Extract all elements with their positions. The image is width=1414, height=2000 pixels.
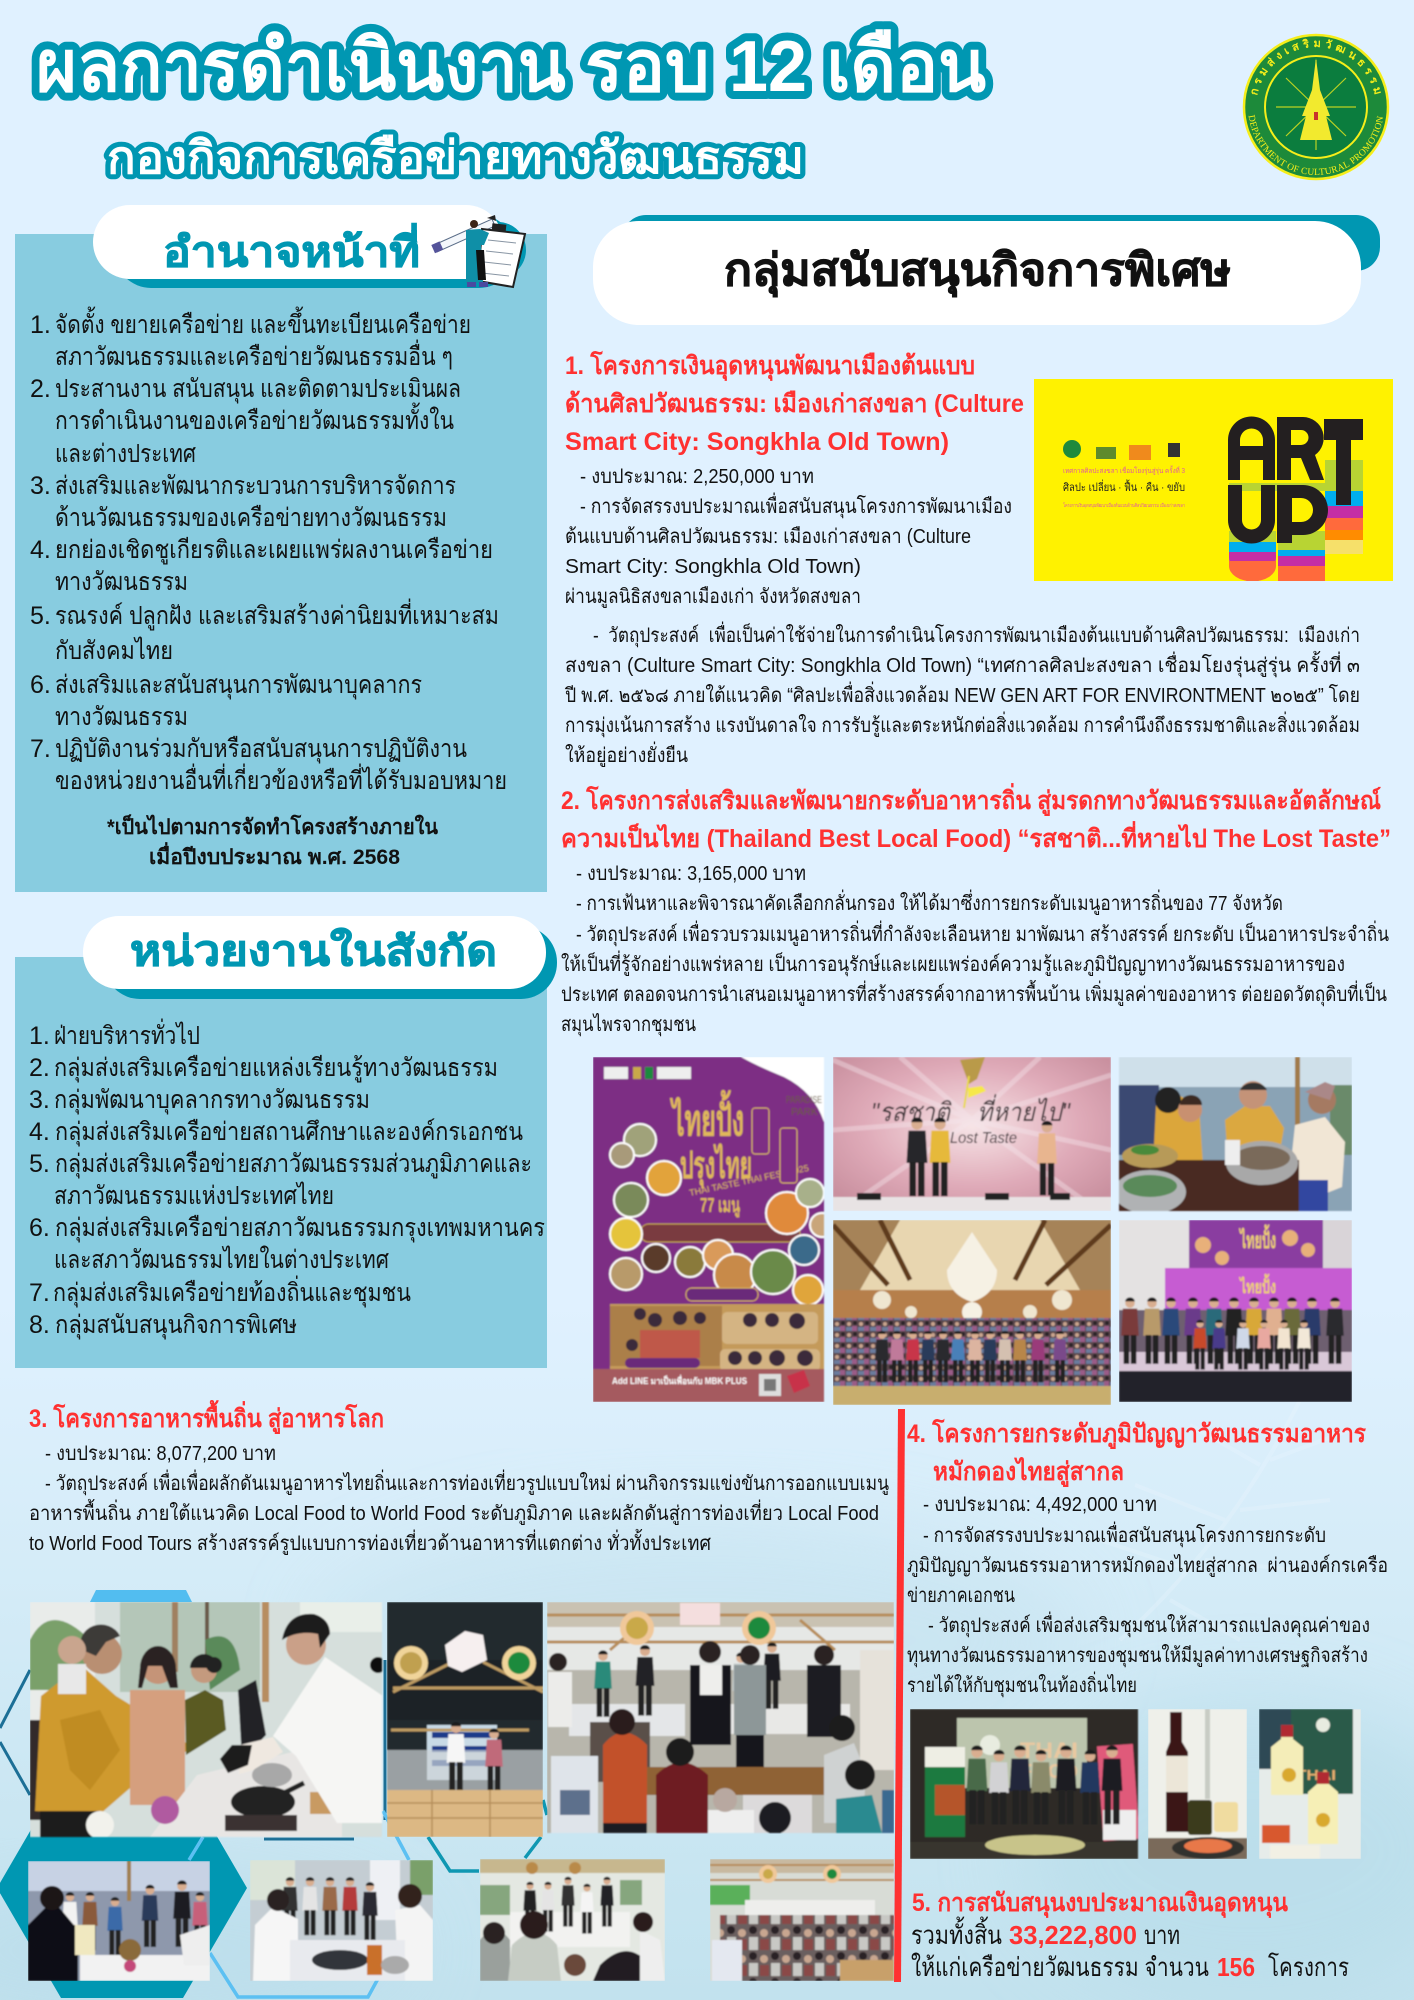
text block 3: อาหารพื้นถิ่น ภายใต้แนวคิด Local Food to World Food ระดับภูมิภาค และผลักดันสู่การท่องเที่ยว Local Food [29, 1499, 879, 1526]
section 5: total support budget: 33,222,800 [1009, 1920, 1137, 1950]
text block 1: Smart City: Songkhla Old Town) [565, 556, 861, 578]
heading 2: ความเป็นไทย (Thailand Best Local Food) “รสชาติ...ที่หายไป The Lost Taste” [561, 821, 1391, 853]
list: duties: 3. [30, 472, 51, 500]
note: *เป็นไปตามการจัดทำโครงสร้างภายใน [107, 813, 439, 839]
photo: press conference group: ไทยปั้ง [1239, 1273, 1276, 1297]
text block 1: ต้นแบบด้านศิลปวัฒนธรรม: เมืองเก่าสงขลา (Culture [565, 526, 971, 548]
heading: powers and duties: อำนาจหน้าที่ [163, 223, 420, 275]
text block 2: สมุนไพรจากชุมชน [561, 1013, 696, 1037]
text block 4: - งบประมาณ: 4,492,000 บาท [923, 1494, 1157, 1516]
section 2: Thailand best local food [561, 783, 1391, 1405]
list: duties: 7. [30, 735, 51, 763]
text block 3: - งบประมาณ: 8,077,200 บาท [45, 1443, 276, 1465]
text block 2: - การเฟ้นหาและพิจารณาคัดเลือกกลั่นกรอง ให้ได้มาซึ่งการยกระดับเมนูอาหารถิ่นของ 77 จังหวัด [576, 889, 1283, 916]
text block 1: ให้อยู่อย่างยั่งยืน [565, 741, 688, 768]
list: units: 8. [29, 1311, 50, 1339]
list: units: 3. [29, 1086, 50, 1114]
logo: department of cultural promotion: กรมส่งเสริมวัฒนธรรม [1252, 38, 1381, 95]
text block 2 [561, 863, 1389, 1037]
list: duties: ปฏิบัติงานร่วมกับหรือสนับสนุนการปฏิบัติงาน [55, 735, 467, 764]
poster: art up: ศิลปะ เปลี่ยน · ฟื้น · คืน · ขยับ [1063, 479, 1185, 494]
heading: subordinate units [83, 916, 557, 999]
photo: workshop cooking [250, 1860, 433, 1981]
photo: ballroom group [833, 1220, 1111, 1405]
poster: art up [1034, 379, 1393, 581]
title: ผลการดำเนินงาน รอบ 12 เดือน [36, 27, 986, 107]
poster: thai taste thai fest: ปรุงไทย [680, 1143, 752, 1189]
heading 4: 4. โครงการยกระดับภูมิปัญญาวัฒนธรรมอาหาร [907, 1418, 1367, 1450]
photo: cooking stage [387, 1602, 543, 1837]
photo: workshop children [28, 1861, 210, 1981]
photo: thai food launch: FOOD [1020, 1761, 1078, 1783]
list: duties: 4. [30, 536, 51, 564]
heading: subordinate units: หน่วยงานในสังกัด [130, 927, 497, 974]
text block 1: ผ่านมูลนิธิสงขลาเมืองเก่า จังหวัดสงขลา [565, 586, 861, 609]
list: units: และสภาวัฒนธรรมไทยในต่างประเทศ [54, 1245, 389, 1274]
text block 1 [565, 466, 1360, 768]
list: duties: ทางวัฒนธรรม [55, 568, 188, 596]
poster: thai taste thai fest [593, 1057, 834, 1402]
list: units: 1. [29, 1022, 50, 1050]
text block 4: ข่ายภาคเอกชน [907, 1585, 1015, 1607]
decorative hexagons [0, 1590, 547, 1998]
list: units: กลุ่มส่งเสริมเครือข่ายสภาวัฒนธรรมกรุงเทพมหานคร [55, 1214, 545, 1243]
photo: food tasting [1114, 1057, 1352, 1214]
heading 3: 3. โครงการอาหารพื้นถิ่น สู่อาหารโลก [29, 1399, 384, 1435]
photo: chef and official [30, 1602, 386, 1839]
list: duties: 6. [30, 671, 51, 699]
list: units: 4. [29, 1118, 50, 1146]
text block 4: รายได้ให้กับชุมชนในท้องถิ่นไทย [907, 1671, 1137, 1698]
list: units: 2. [29, 1054, 50, 1082]
photo: sauces and jars [1148, 1709, 1247, 1859]
list: duties: 2. [30, 375, 51, 403]
text block 4: - การจัดสรรงบประมาณเพื่อสนับสนุนโครงการยกระดับ [923, 1521, 1326, 1548]
text block 2: - งบประมาณ: 3,165,000 บาท [576, 863, 806, 885]
poster: thai taste thai fest: ไทยปั้ง [670, 1089, 744, 1144]
list: units: 6. [29, 1214, 50, 1242]
section 3: local food to world food [28, 1399, 894, 1981]
section 5: total support budget: โครงการ [1268, 1952, 1349, 1982]
section 5: total support budget: 5. การสนับสนุนงบประมาณเงินอุดหนุน [912, 1889, 1288, 1919]
text block 4 [907, 1494, 1388, 1698]
section 5: total support budget: รวมทั้งสิ้น [911, 1916, 1002, 1950]
red divider bar [894, 1409, 905, 1982]
photo: lost taste stage [833, 1057, 1111, 1211]
list: duties: รณรงค์ ปลูกฝัง และเสริมสร้างค่านิยมที่เหมาะสม [55, 598, 499, 631]
photo: workshop crowd [480, 1859, 665, 1981]
panel: subordinate units [15, 916, 557, 1368]
section 5: total support budget [911, 1889, 1349, 1982]
list: duties: ประสานงาน สนับสนุน และติดตามประเมินผล [55, 375, 461, 404]
photo: booth crowd [710, 1859, 894, 1981]
photo: pineapple bottles: THAI [1296, 1767, 1336, 1784]
list: units: กลุ่มส่งเสริมเครือข่ายสภาวัฒนธรรมส่วนภูมิภาคและ [55, 1150, 532, 1179]
photo: lost taste stage: "รสชาติ [871, 1097, 952, 1127]
list: units: กลุ่มพัฒนาบุคลากรทางวัฒนธรรม [54, 1086, 370, 1115]
list: duties: ส่งเสริมและพัฒนากระบวนการบริหารจัดการ [55, 472, 456, 500]
section 5: total support budget: ให้แก่เครือข่ายวัฒนธรรม จำนวน [911, 1952, 1209, 1982]
list: units: กลุ่มส่งเสริมเครือข่ายสถานศึกษาและองค์กรเอกชน [55, 1118, 523, 1147]
poster: thai taste thai fest: 77 เมนู [700, 1195, 740, 1219]
poster: art up: เทศกาลศิลปะสงขลา เชื่อมโยงรุ่นสู่รุ่น ครั้งที่ 3 [1063, 464, 1185, 475]
note: เมื่อปีงบประมาณ พ.ศ. 2568 [149, 841, 400, 869]
photo: thai food launch [910, 1709, 1139, 1859]
heading 1: ด้านศิลปวัฒนธรรม: เมืองเก่าสงขลา (Culture [565, 390, 1024, 418]
text block 1: - งบประมาณ: 2,250,000 บาท [580, 466, 814, 488]
text block 3 [29, 1443, 889, 1556]
heading 1: Smart City: Songkhla Old Town) [565, 428, 949, 456]
list: duties: จัดตั้ง ขยายเครือข่าย และขึ้นทะเบียนเครือข่าย [55, 306, 471, 339]
poster: thai taste thai fest: THAI TASTE THAI FEST 2025 [688, 1163, 810, 1198]
list: duties: ส่งเสริมและสนับสนุนการพัฒนาบุคลากร [55, 671, 422, 700]
text block 1: สงขลา (Culture Smart City: Songkhla Old Town) “เทศกาลศิลปะสงขลา เชื่อมโยงรุ่นสู่รุ่น ครั้งที่ ๓ [565, 651, 1360, 678]
logo: department of cultural promotion [1242, 34, 1390, 180]
heading 4: หมักดองไทยสู่สากล [933, 1456, 1124, 1488]
heading 4 [907, 1418, 1367, 1488]
section 1: culture fund Songkhla [565, 350, 1393, 768]
list: duties: 1. [30, 311, 51, 339]
photo: booth audience [547, 1602, 894, 1834]
list: units: สภาวัฒนธรรมแห่งประเทศไทย [54, 1181, 334, 1210]
list: duties [30, 306, 507, 795]
note [107, 813, 439, 869]
photo: lost taste stage: Lost Taste [950, 1130, 1017, 1147]
list: duties: ทางวัฒนธรรม [55, 703, 188, 731]
heading 1: 1. โครงการเงินอุดหนุนพัฒนาเมืองต้นแบบ [565, 350, 975, 382]
list: duties: สภาวัฒนธรรมและเครือข่ายวัฒนธรรมอื่น ๆ [55, 339, 453, 371]
logo: department of cultural promotion: DEPARTMENT OF CULTURAL PROMOTION [1248, 114, 1384, 175]
panel: powers and duties [15, 205, 547, 892]
list: duties: การดำเนินงานของเครือข่ายวัฒนธรรมทั้งใน [55, 402, 454, 435]
list: units: ฝ่ายบริหารทั่วไป [54, 1018, 200, 1050]
poster: art up: โครงการเงินอุดหนุนพัฒนาเมืองต้นแบบด้านศิลปวัฒนธรรม เมืองเก่าสงขลา [1063, 502, 1185, 509]
photo: thai food launch: THAI [1020, 1738, 1078, 1763]
heading: powers and duties [93, 205, 526, 288]
list: duties: ของหน่วยงานอื่นที่เกี่ยวข้องหรือที่ได้รับมอบหมาย [55, 763, 507, 795]
section 5: total support budget: 156 [1217, 1952, 1255, 1982]
poster: thai taste thai fest: Add LINE มาเป็นเพื่อนกับ MBK PLUS [612, 1374, 747, 1386]
list: units: กลุ่มสนับสนุนกิจการพิเศษ [55, 1311, 297, 1340]
photo: lost taste stage: ที่หายไป" [977, 1094, 1072, 1127]
heading 2 [561, 783, 1391, 853]
section 4: fermented food wisdom [907, 1418, 1388, 1859]
photo: press conference group: ไทยปั้ง [1239, 1224, 1276, 1253]
subtitle: กองกิจการเครือข่ายทางวัฒนธรรม [107, 132, 804, 183]
poster: thai taste thai fest: PARK [791, 1107, 818, 1118]
list: duties: ด้านวัฒนธรรมของเครือข่ายทางวัฒนธรรม [55, 504, 447, 532]
list: units [29, 1018, 545, 1340]
section 5: total support budget: บาท [1144, 1920, 1180, 1950]
list: duties: 5. [30, 602, 51, 630]
heading 1 [565, 350, 1024, 456]
list: duties: และต่างประเทศ [55, 440, 196, 468]
photo: pineapple bottles [1259, 1709, 1361, 1859]
text block 3: to World Food Tours สร้างสรรค์รูปแบบการท่องเที่ยวด้านอาหารที่แตกต่าง ทั่วทั้งประเทศ [29, 1529, 711, 1556]
text block 1: - การจัดสรรงบประมาณเพื่อสนับสนุนโครงการพัฒนาเมือง [580, 492, 1012, 519]
heading: special activities support group [593, 215, 1380, 325]
list: units: 5. [29, 1150, 50, 1178]
text block 3: - วัตถุประสงค์ เพื่อเพื่อผลักดันเมนูอาหารไทยถิ่นและการท่องเที่ยวรูปแบบใหม่ ผ่านกิจกรรมแข่งขันการออกแบบเมนู [45, 1469, 889, 1496]
icon: person with clipboard [431, 215, 525, 287]
heading: special activities support group: กลุ่มสนับสนุนกิจการพิเศษ [724, 246, 1231, 298]
list: units: 7. [29, 1279, 50, 1307]
list: units: กลุ่มส่งเสริมเครือข่ายท้องถิ่นและชุมชน [53, 1275, 411, 1308]
list: units: กลุ่มส่งเสริมเครือข่ายแหล่งเรียนรู้ทางวัฒนธรรม [54, 1054, 498, 1083]
list: duties: ยกย่องเชิดชูเกียรติและเผยแพร่ผลงานเครือข่าย [55, 536, 493, 565]
photo: press conference group [1119, 1220, 1352, 1402]
list: duties: กับสังคมไทย [55, 636, 173, 665]
